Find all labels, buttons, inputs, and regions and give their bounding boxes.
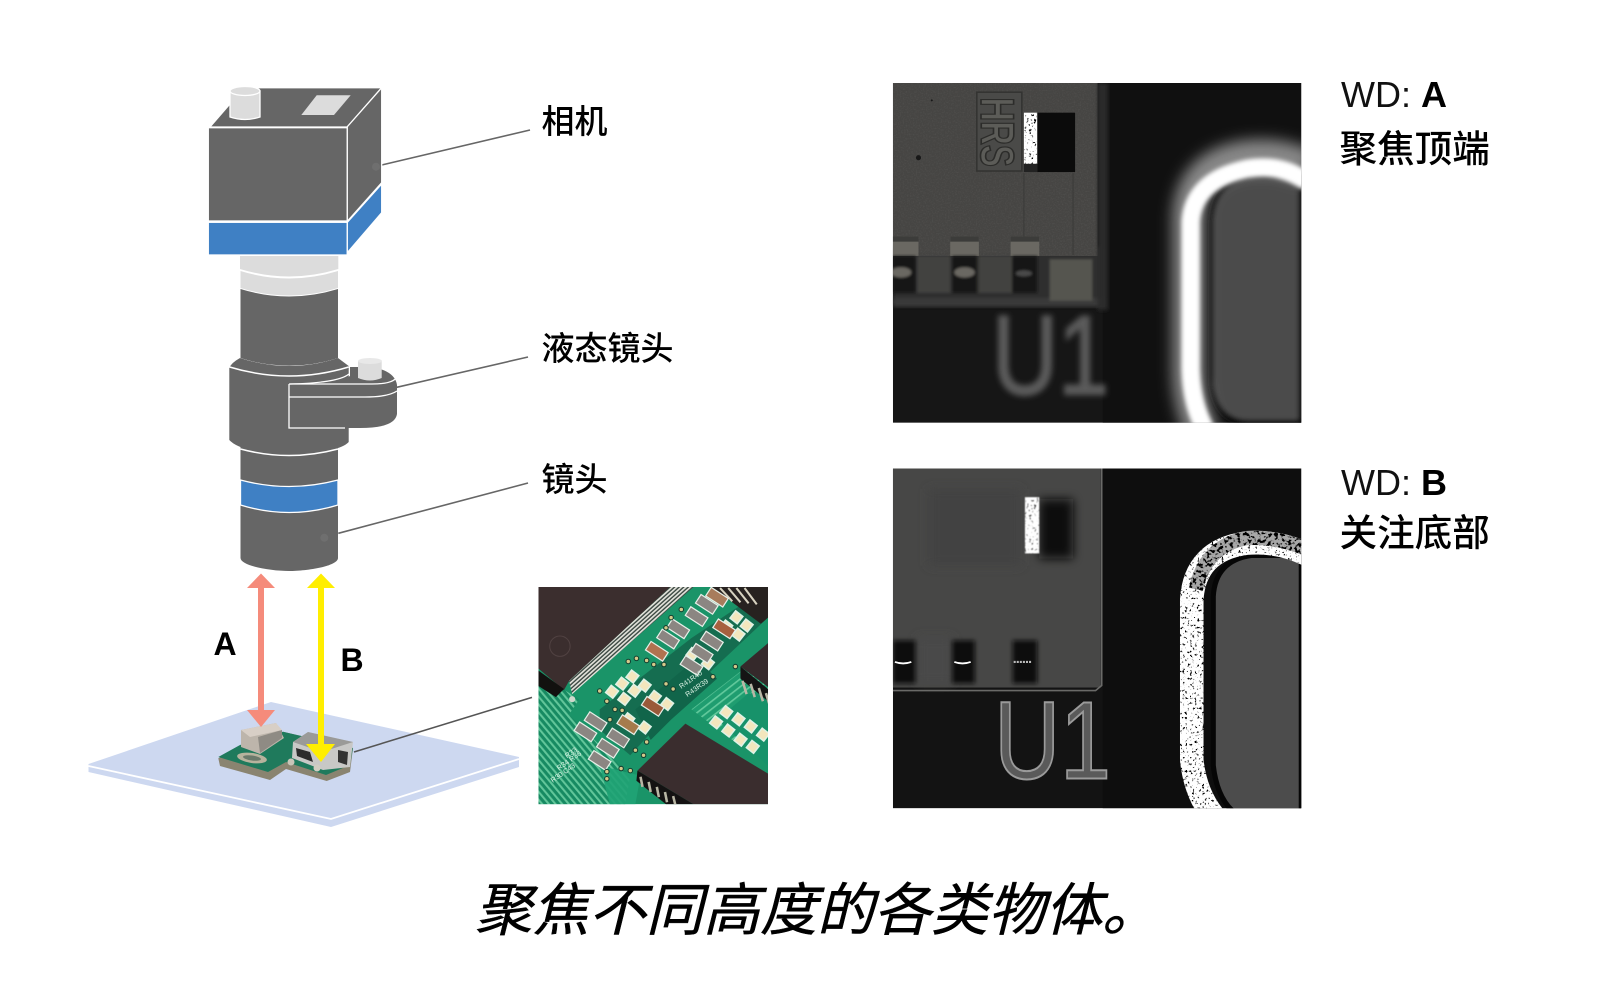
lens barrel [240, 256, 338, 571]
diagram: liquid lens camera assembly [208, 86, 397, 571]
pcb close-up photo: R33 [564, 746, 579, 760]
arrow A [247, 574, 275, 727]
sample circuit board [218, 723, 353, 781]
liquid lens collar [229, 358, 397, 456]
right chip [740, 643, 768, 687]
label: B: B [340, 642, 364, 678]
pcb close-up photo: R34 R36 [555, 750, 583, 772]
camera body [208, 86, 382, 255]
vias [597, 607, 738, 781]
oval ring [1213, 555, 1301, 822]
photo: WD A, top in focus: U1 [992, 292, 1109, 418]
label: camera: 相机 [542, 103, 608, 140]
label: A: A [213, 626, 237, 662]
cream pads [606, 611, 769, 753]
pcb close-up photo: R30 C43 [549, 762, 577, 784]
label: WD B: WD: B [1341, 462, 1447, 503]
label: WD A: WD: A [1341, 74, 1447, 115]
photo: WD A, top in focus: HRS [971, 97, 1024, 167]
pin notches [891, 237, 1092, 301]
platform [88, 702, 519, 827]
caption: 聚焦不同高度的各类物体。 [475, 879, 1159, 943]
big chip [538, 587, 670, 690]
smd resistors [574, 587, 735, 770]
label: liquid lens: 液态镜头 [542, 330, 674, 367]
label: focus top: 聚焦顶端 [1340, 128, 1490, 170]
pcb close-up photo [538, 587, 769, 804]
photo: WD B, bottom in focus: U1 [994, 680, 1111, 803]
oval ring [1211, 175, 1301, 423]
pcb close-up photo: R41R40 [678, 669, 704, 691]
photo: WD B, bottom in focus [893, 468, 1307, 822]
leader line to pcb close-up [354, 697, 532, 752]
label: focus bottom: 关注底部 [1340, 512, 1490, 554]
bottom chip [637, 724, 768, 804]
label: lens: 镜头 [542, 461, 608, 498]
photo: WD A, top in focus [891, 83, 1307, 436]
leader lines [338, 130, 530, 533]
pcb close-up photo: R43R39 [684, 677, 710, 699]
chip in focus [893, 83, 1098, 256]
arrow B [306, 574, 335, 762]
